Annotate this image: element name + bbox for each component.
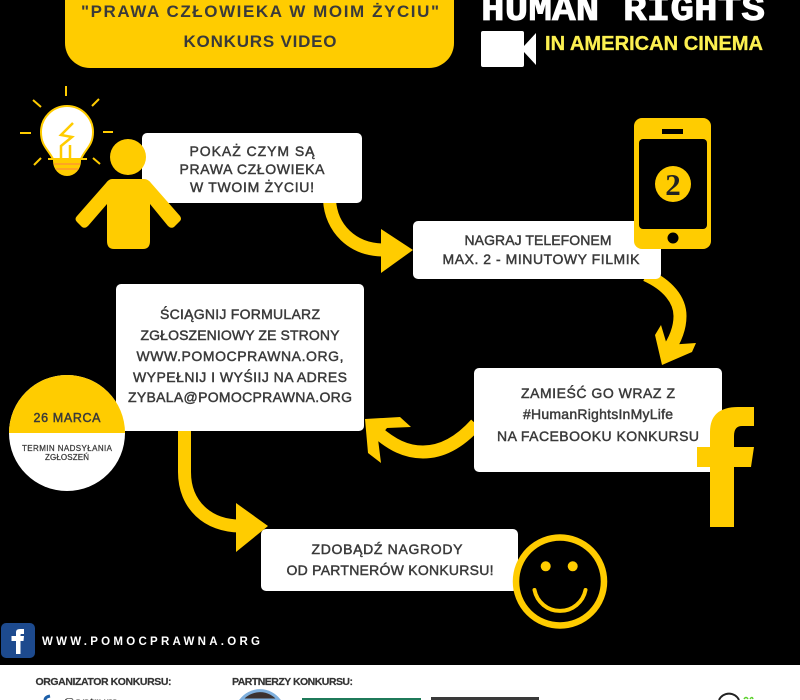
- title banner: KONKURS VIDEO: [184, 32, 336, 51]
- panel: step 3, post on Facebook: #HumanRightsInMyLife: [523, 406, 673, 422]
- arrow: step 1 to step 2: [330, 200, 413, 273]
- icon: smartphone: [634, 118, 711, 249]
- arrow: step 2 to step 3: [646, 275, 696, 365]
- organiser logo: [45, 696, 119, 700]
- title banner: [65, 0, 454, 68]
- panel: step 4, download form: WYPEŁNIJ I WYŚIIJ NA ADRES: [133, 368, 347, 385]
- panel: step 4, download form: ZGŁOSZENIOWY ZE STRONY: [140, 327, 340, 343]
- panel: step 3, post on Facebook: [474, 368, 722, 472]
- panel: step 1, show human rights: POKAŻ CZYM SĄ: [190, 142, 315, 159]
- arrow: step 4 to step 5: [184, 428, 268, 552]
- icon: Facebook f: [697, 407, 754, 527]
- panel: step 2, record with phone: [413, 221, 661, 279]
- panel: step 3, post on Facebook: NA FACEBOOKU KONKURSU: [497, 428, 699, 444]
- deadline badge: 26 March: [9, 375, 125, 491]
- deadline badge: 26 March: ZGŁOSZEŃ: [45, 453, 89, 462]
- panel: step 1, show human rights: W TWOIM ŻYCIU!: [190, 178, 314, 195]
- panel: step 1, show human rights: [142, 133, 362, 203]
- website address: WWW.POMOCPRAWNA.ORG: [42, 636, 260, 648]
- icon: video camera: [481, 31, 536, 67]
- footer: organiser and partners: [0, 665, 800, 700]
- panel: step 3, post on Facebook: ZAMIEŚĆ GO WRAZ Z: [521, 384, 675, 401]
- panel: step 5, win prizes: [261, 529, 518, 591]
- panel: step 1, show human rights: PRAWA CZŁOWIEKA: [180, 161, 325, 177]
- panel: step 4, download form: [116, 284, 364, 431]
- partner logo: round badge: [241, 691, 279, 700]
- deadline badge: 26 March: TERMIN NADSYŁANIA: [22, 444, 113, 453]
- logo: Human Rights in American Cinema: IN AMERICAN CINEMA: [545, 33, 763, 55]
- icon: Facebook square: [1, 623, 35, 658]
- panel: step 5, win prizes: OD PARTNERÓW KONKURSU!: [286, 562, 494, 578]
- arrow: step 3 to step 4: [365, 417, 476, 463]
- partner logo: green: [302, 698, 421, 700]
- partners heading: PARTNERZY KONKURSU:: [232, 676, 353, 688]
- logo: Human Rights in American Cinema: [481, 0, 765, 67]
- icon: smiley face: [516, 538, 604, 626]
- panel: step 2, record with phone: MAX. 2 - MINUTOWY FILMIK: [442, 251, 640, 267]
- partner logo: dark: [431, 697, 539, 700]
- panel: step 4, download form: ŚCIĄGNIJ FORMULARZ: [160, 305, 320, 322]
- icon: person: [76, 139, 181, 249]
- partner logo: round outline: [719, 694, 753, 700]
- organiser heading: ORGANIZATOR KONKURSU:: [36, 676, 172, 688]
- panel: step 5, win prizes: ZDOBĄDŹ NAGRODY: [312, 541, 463, 557]
- icon: smartphone: 2: [665, 167, 681, 202]
- title banner: "PRAWA CZŁOWIEKA W MOIM ŻYCIU": [81, 2, 439, 21]
- panel: step 2, record with phone: NAGRAJ TELEFONEM: [464, 232, 612, 248]
- deadline badge: 26 March: 26 MARCA: [34, 411, 101, 425]
- panel: step 4, download form: ZYBALA@POMOCPRAWNA.ORG: [128, 389, 352, 405]
- icon: light bulb: [20, 86, 113, 176]
- panel: step 4, download form: WWW.POMOCPRAWNA.ORG,: [136, 348, 344, 364]
